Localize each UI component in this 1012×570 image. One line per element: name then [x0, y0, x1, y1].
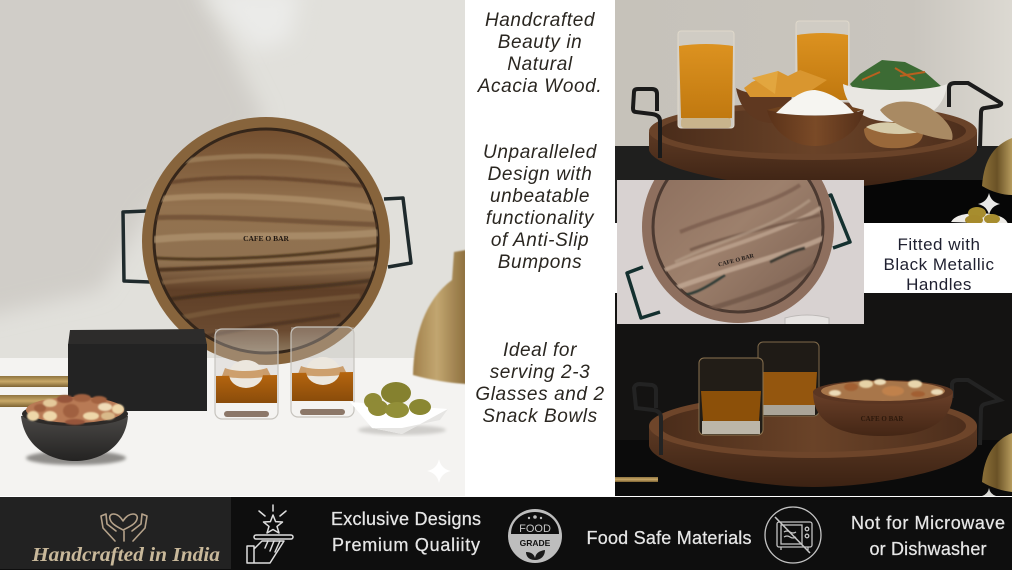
caption text: Handles	[906, 275, 972, 294]
olive dish	[350, 382, 448, 435]
sparkle	[978, 193, 1000, 215]
salad bowl	[843, 60, 947, 122]
text: anti-slip design: Bumpons	[498, 252, 582, 273]
caption background	[865, 223, 1012, 293]
olive dish	[951, 207, 1008, 223]
text: premium quality: Premium Qualiity	[332, 535, 480, 555]
leaf	[526, 550, 545, 560]
text: anti-slip design: unbeatable	[490, 186, 590, 207]
tray disc	[142, 117, 390, 365]
caption text: Fitted with	[898, 235, 980, 254]
wall	[0, 0, 466, 360]
panel: handles caption	[865, 223, 1012, 294]
badge stars	[528, 515, 542, 519]
dark table	[615, 440, 1012, 496]
text: serving capacity: Glasses and 2	[475, 384, 605, 405]
tray well	[653, 142, 823, 312]
photo: tray with juice and snacks	[615, 0, 1012, 225]
tray	[649, 102, 977, 189]
icon: star on serving hand	[247, 505, 293, 563]
tray well	[154, 129, 378, 353]
badge disc	[508, 509, 562, 563]
tray upright	[123, 117, 411, 365]
grade label: GRADE	[520, 538, 551, 548]
whisky glass front	[699, 358, 763, 435]
whisky glass back	[758, 342, 819, 416]
dark table	[615, 146, 1012, 224]
wood grain	[150, 156, 385, 338]
tray handles	[123, 198, 411, 282]
handle left	[633, 89, 660, 158]
whisky glass left	[215, 329, 278, 419]
text: natural acacia wood: Handcrafted	[485, 10, 595, 31]
tray rim	[642, 131, 834, 323]
sparkle	[428, 460, 450, 482]
glass rim	[785, 315, 829, 324]
text: not for microwave: Not for Microwave	[851, 513, 1005, 533]
wooden bowl with chips	[736, 70, 826, 110]
panel: benefits strip	[0, 497, 1012, 570]
text: anti-slip design: functionality	[486, 208, 595, 229]
text: serving capacity: Ideal for	[503, 340, 577, 361]
nut bowl	[21, 394, 128, 465]
icon: food grade badge	[508, 509, 562, 563]
panel: feature text	[475, 10, 605, 427]
tray	[649, 394, 977, 487]
photo: close-up of tray top	[617, 131, 864, 324]
handle right	[949, 83, 1001, 148]
juice glass right	[796, 21, 849, 101]
table top	[0, 358, 466, 496]
badge: handcrafted in india	[0, 497, 231, 569]
text: serving capacity: Snack Bowls	[482, 406, 598, 427]
text: natural acacia wood: Beauty in	[498, 32, 582, 53]
text: or dishwasher: or Dishwasher	[870, 539, 986, 559]
bowl with rice	[767, 90, 864, 146]
handles	[627, 195, 850, 318]
caption text: Black Metallic	[884, 255, 994, 274]
wood grain	[660, 185, 830, 315]
bowl brand mark: CAFE O BAR	[861, 415, 904, 423]
gold bar	[615, 477, 658, 482]
badge background	[0, 497, 231, 569]
badge dark cap	[511, 512, 559, 534]
wall shadow	[0, 0, 265, 320]
text: food safe materials: Food Safe Materials	[586, 528, 752, 548]
table shadow	[864, 180, 1012, 223]
text: anti-slip design: Design with	[488, 164, 592, 185]
brass bell lamp	[413, 250, 466, 384]
strip background	[0, 497, 1012, 570]
photo: tray with whisky and nuts	[615, 293, 1012, 496]
brand mark: CAFE O BAR	[718, 253, 755, 269]
sparkle	[982, 488, 996, 496]
juice glass left	[678, 31, 734, 128]
text: exclusive designs: Exclusive Designs	[331, 509, 481, 529]
text: anti-slip design: of Anti-Slip	[491, 230, 589, 251]
brass bell	[982, 138, 1012, 195]
black box	[68, 329, 207, 411]
whisky glass right	[291, 327, 354, 417]
icon: hands holding heart	[101, 514, 147, 541]
bread	[864, 101, 953, 148]
wall	[615, 0, 1012, 146]
brand mark: CAFE O BAR	[243, 234, 289, 243]
gold bars	[0, 376, 70, 407]
icon: no microwave	[765, 507, 821, 563]
text: serving capacity: serving 2-3	[490, 362, 590, 383]
handcrafted text: Handcrafted in India	[31, 544, 220, 566]
photo: tray on white table	[0, 0, 466, 496]
backdrop	[617, 180, 864, 324]
wooden nut bowl	[813, 379, 953, 436]
brass bell	[982, 433, 1012, 492]
dark background	[615, 293, 1012, 440]
text: anti-slip design: Unparalleled	[483, 142, 597, 163]
handle right	[952, 380, 1000, 445]
handle left	[634, 384, 661, 455]
text: natural acacia wood: Acacia Wood.	[477, 76, 602, 97]
text: natural acacia wood: Natural	[507, 54, 573, 75]
wall highlight	[218, 0, 294, 44]
food label: FOOD	[519, 523, 551, 535]
